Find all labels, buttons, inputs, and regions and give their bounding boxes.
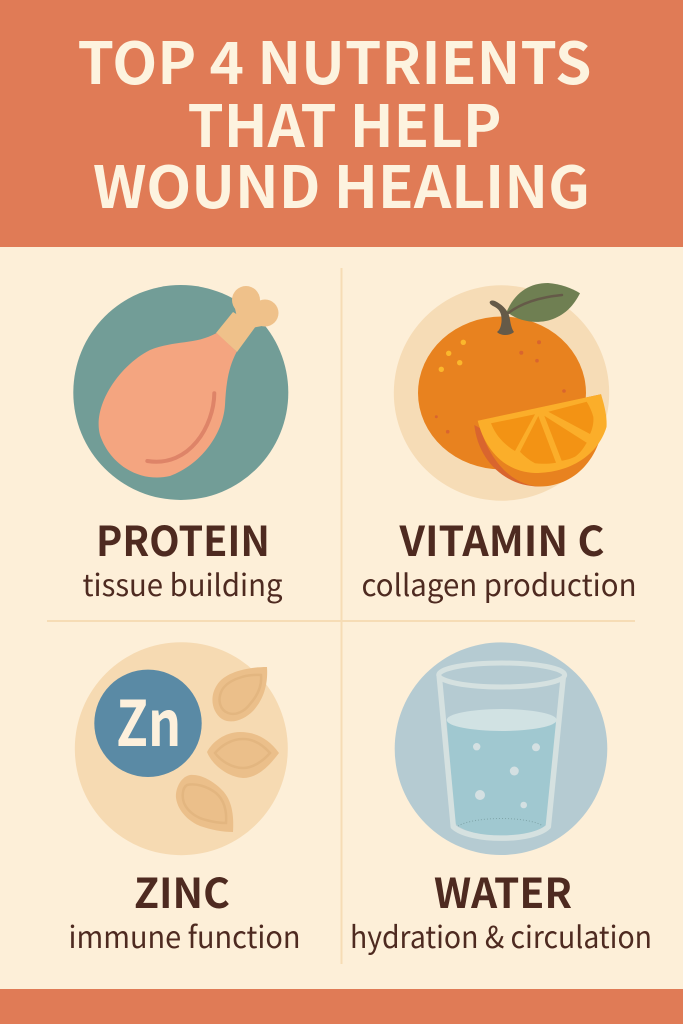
description: hydration and circulation: hydration & circulation — [350, 913, 652, 957]
panel: zinc — [68, 642, 300, 957]
title: WOUND HEALING — [93, 141, 590, 225]
label: water: WATER — [434, 860, 572, 920]
icon: glass of water — [395, 642, 607, 855]
header banner — [0, 0, 683, 247]
description: tissue building: tissue building — [82, 561, 283, 605]
icon: chicken drumstick — [73, 285, 288, 500]
footer band — [0, 989, 683, 1024]
description: collagen production: collagen production — [362, 561, 636, 605]
label: zinc: ZINC — [134, 860, 230, 920]
title — [78, 17, 592, 225]
icon: zinc badge and seeds: Zn — [116, 674, 181, 765]
panel: water — [350, 642, 652, 957]
panel: vitamin c — [362, 283, 636, 605]
description: immune function: immune function — [68, 913, 300, 957]
title: TOP 4 NUTRIENTS — [78, 17, 592, 101]
title: THAT HELP — [188, 80, 502, 164]
label: vitamin c: VITAMIN C — [398, 508, 604, 568]
label: protein: PROTEIN — [96, 508, 270, 568]
icon: orange with slice and leaf — [394, 283, 609, 501]
icon: zinc badge and seeds — [75, 642, 288, 855]
panel: protein — [73, 285, 288, 605]
